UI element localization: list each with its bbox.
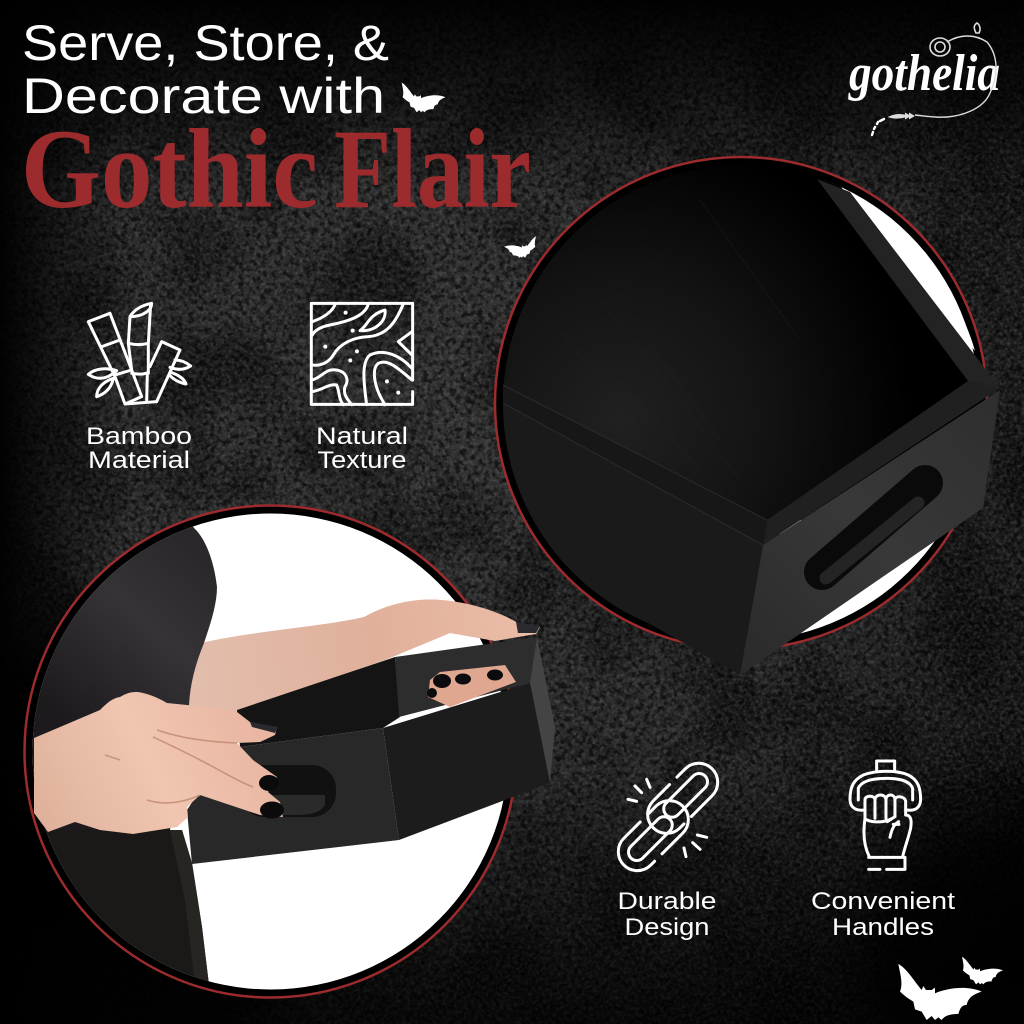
white photo backdrop: [32, 514, 504, 990]
nails: front hand: [250, 722, 284, 818]
title line: Gothic Flair: [21, 107, 531, 232]
label: Bamboo Material: [86, 423, 192, 474]
handle cutout: [822, 483, 925, 578]
tray back rim: [817, 179, 1000, 388]
feature: Convenient Handles: [811, 761, 955, 941]
tray interior: [504, 180, 952, 520]
dark skirt lower: [46, 830, 208, 982]
handle cutout lower: [240, 765, 336, 817]
logo: gothelia: [848, 23, 1000, 135]
white wedge top right: [850, 192, 975, 351]
icon dots: wood grain: [323, 311, 400, 395]
tray left rim: [503, 385, 767, 545]
tray rim highlight: [503, 385, 767, 545]
finger crease shadows: [105, 730, 253, 803]
icon: fist gripping handle: [850, 761, 921, 869]
title line: Serve, Store, &: Serve, Store, &: [22, 15, 389, 71]
icon: wood grain square: [311, 303, 413, 405]
fingers through far handle: [427, 665, 516, 707]
feature: Natural Texture: [311, 303, 413, 474]
label: Bamboo Material: Material: [88, 447, 190, 474]
panel: upper circle product close-up: [490, 150, 1000, 675]
label: Convenient Handles: [811, 888, 955, 941]
nail: upper hand: [516, 622, 540, 633]
front hand: [34, 692, 284, 834]
icon: small bat bottom right: [962, 957, 1003, 984]
tray left outer face: [503, 403, 763, 675]
tray front rim: [763, 381, 1000, 545]
title line: Decorate with: Decorate with: [22, 68, 385, 124]
label: Natural Texture: Texture: [318, 447, 406, 474]
label: Bamboo Material: Bamboo: [86, 423, 192, 450]
red ring lower: [24, 506, 516, 998]
icon: bamboo: [88, 303, 191, 404]
white background slivers: [780, 180, 974, 634]
panel: lower circle lifestyle photo: [20, 500, 540, 1000]
red ring upper: [495, 157, 987, 649]
title: [21, 15, 531, 232]
tray right outer face: [383, 683, 550, 840]
title line: Gothic Flair: Gothic: [21, 107, 318, 232]
upper hand over ring: [365, 600, 540, 660]
tray end face: [740, 390, 1000, 675]
tray inside right wall: [395, 637, 537, 717]
label: Durable Design: [618, 888, 716, 941]
brushed grain streaks: [700, 200, 800, 340]
label: Natural Texture: [316, 423, 408, 474]
nails: far hand: [427, 670, 503, 698]
tray left outer face lower: [187, 728, 399, 864]
icon: chain link: [610, 755, 726, 879]
label: Natural Texture: Natural: [316, 423, 408, 450]
tray end wall: [530, 637, 555, 783]
feature: Durable Design: [610, 755, 726, 941]
icon: large bat bottom right: [898, 964, 982, 1020]
label: Convenient Handles: Handles: [832, 914, 934, 941]
dark shirt upper: [32, 526, 217, 830]
title line: Gothic Flair: Flair: [334, 107, 531, 232]
tray inside left wall: [237, 657, 400, 747]
feature: Bamboo Material: [86, 303, 192, 474]
icon: small bat: [504, 236, 536, 258]
label: Durable Design: Design: [624, 914, 710, 941]
forearm and upper hand: [189, 600, 456, 712]
label: Convenient Handles: Convenient: [811, 888, 955, 915]
label: Durable Design: Durable: [618, 888, 716, 915]
logo: gothelia: gothelia: [848, 45, 1000, 102]
icon: title bat: [402, 83, 446, 112]
